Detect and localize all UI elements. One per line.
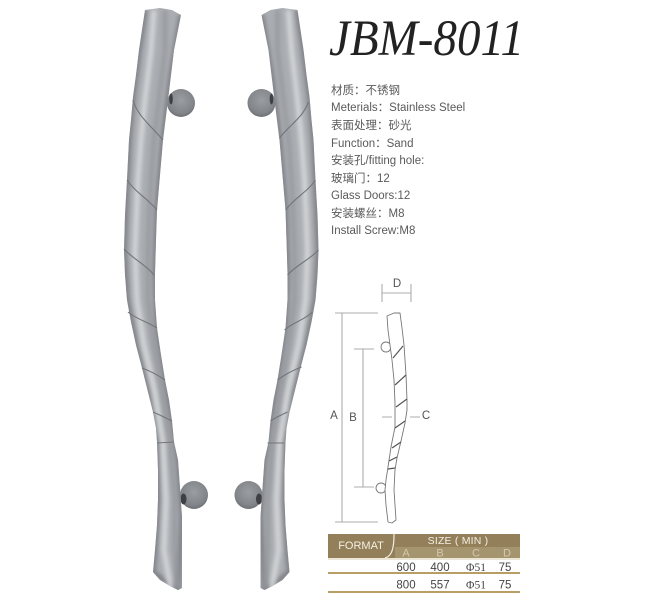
- right handle spiral grooves: [268, 102, 318, 443]
- specification text block: 表面处理：砂光: [331, 118, 412, 132]
- handle drawing grooves: [388, 346, 407, 469]
- dimension labels: C: [422, 410, 430, 422]
- column letters: D: [503, 548, 511, 560]
- format label: FORMAT: [338, 540, 384, 552]
- dimension labels: [330, 278, 430, 424]
- specification text block: 安装螺丝：M8: [331, 206, 404, 220]
- specification text block: Glass Doors:12: [331, 190, 410, 202]
- row 800: Φ51: [466, 580, 486, 592]
- icon: upper left standoff knob: [167, 89, 195, 117]
- column letters: [402, 548, 511, 560]
- row 800: 75: [499, 580, 511, 592]
- column letters: A: [402, 548, 410, 560]
- right door handle: [234, 8, 319, 590]
- column letters: C: [472, 548, 480, 560]
- row 800: 800: [396, 580, 416, 592]
- specification text block: Function：Sand: [331, 138, 413, 150]
- dimension diagram: [330, 278, 430, 523]
- icon: lower right standoff knob: [234, 481, 262, 509]
- row 600: 600: [396, 562, 416, 574]
- drawing standoff knobs: [376, 342, 391, 493]
- icon: upper right standoff knob: [248, 89, 276, 117]
- dimension labels: A: [330, 410, 338, 422]
- left handle body: [124, 8, 182, 590]
- right handle body: [260, 8, 318, 590]
- handle outline drawing: [385, 313, 407, 523]
- specification text block: 材质：不锈钢: [331, 83, 400, 97]
- specification text block: 玻璃门：12: [331, 171, 390, 185]
- dimension labels: B: [349, 412, 357, 424]
- row 600: 75: [499, 562, 511, 574]
- size heading: SIZE ( MIN ): [428, 535, 488, 547]
- icon: lower left standoff knob: [180, 481, 208, 509]
- column letters: B: [436, 548, 444, 560]
- row 600: Φ51: [466, 562, 486, 574]
- row 600: [396, 562, 511, 574]
- title: JBM-8011: [329, 11, 524, 67]
- specification text block: 安装孔/fitting hole:: [331, 153, 424, 167]
- table header band: [328, 534, 520, 560]
- row 800: [396, 580, 511, 592]
- specification text block: Install Screw:M8: [331, 225, 415, 237]
- specification text block: Meterials：Stainless Steel: [331, 102, 465, 114]
- dimension labels: D: [393, 278, 401, 290]
- left door handle: [124, 8, 208, 590]
- left handle spiral grooves: [124, 100, 174, 443]
- row 600: 400: [430, 562, 450, 574]
- dimension lines: [335, 284, 420, 522]
- specification text block: [331, 83, 465, 237]
- size table: [328, 534, 520, 592]
- row 800: 557: [430, 580, 450, 592]
